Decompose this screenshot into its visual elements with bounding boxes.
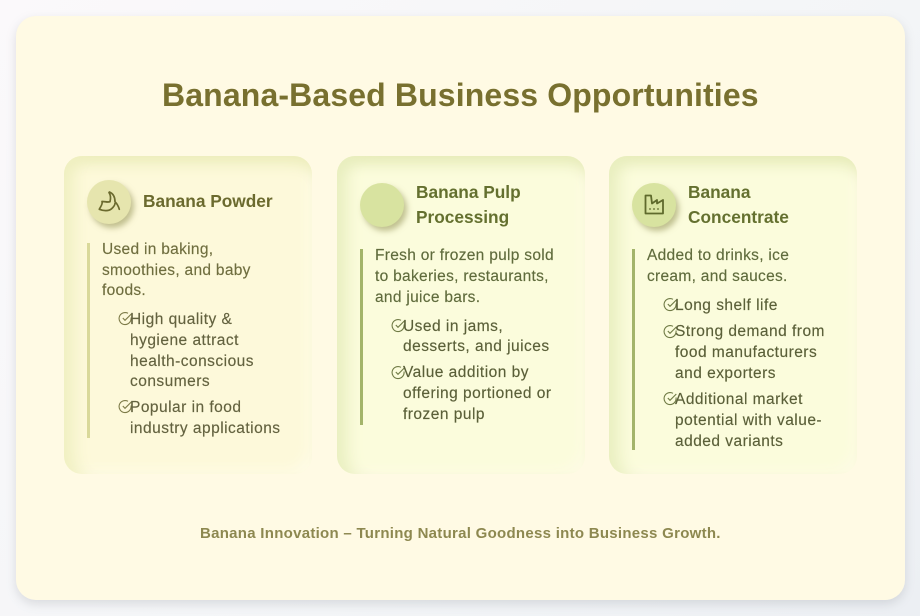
bullet: hygiene: hygiene attract: [130, 332, 239, 349]
accent bar: [632, 249, 635, 450]
description: foods.: [102, 282, 146, 299]
description: cream, and sauces.: [647, 268, 788, 285]
bullet: market potential: potential with value-: [675, 412, 822, 429]
bullet: demand: [664, 323, 825, 382]
heading: Banana Powder: [143, 191, 273, 211]
bullet: popular: Popular in food: [130, 399, 241, 416]
title: Banana-Based Business Opportunities: [162, 77, 759, 113]
bullet: popular: [118, 399, 281, 437]
description: smoothies, and baby: [102, 262, 251, 279]
panel: Banana Pulp Processing: [337, 156, 585, 474]
bullet: market potential: [664, 391, 822, 450]
bullet: demand: and exporters: [675, 365, 776, 382]
heading: Concentrate: [688, 207, 789, 227]
heading: Banana: [688, 182, 750, 202]
heading: [416, 182, 521, 227]
bullet: hygiene: High quality &: [130, 311, 232, 328]
accent bar: [360, 249, 363, 425]
description: [375, 247, 554, 306]
bullet: hygiene: consumers: [130, 373, 210, 390]
bullet: jams: [392, 318, 550, 355]
bullet: hygiene: [118, 311, 254, 390]
footer tagline: Banana Innovation – Turning Natural Goodness into Business Growth.: [200, 525, 721, 542]
description: [647, 247, 789, 285]
bullet: hygiene: health-conscious: [130, 353, 254, 370]
heading: Processing: [416, 207, 509, 227]
bullet: market potential: Additional market: [675, 391, 803, 408]
bullet: market potential: added variants: [675, 433, 783, 450]
panel: Banana Concentrate: [609, 156, 857, 474]
bullet: value addition: [392, 364, 552, 423]
heading: [688, 182, 789, 227]
description: and juice bars.: [375, 289, 480, 306]
description: Used in baking,: [102, 241, 213, 258]
icon: banana: [87, 180, 131, 224]
panel: Banana Powder: [64, 156, 312, 474]
bullet: demand: food manufacturers: [675, 344, 817, 361]
description: Added to drinks, ice: [647, 247, 789, 264]
bullet: value addition: Value addition by: [403, 364, 529, 381]
bullet: popular: industry applications: [130, 420, 281, 437]
bullet: demand: Strong demand from: [675, 323, 825, 340]
heading: Banana Pulp: [416, 182, 521, 202]
icon: factory: [632, 183, 676, 227]
icon: blank circle: [360, 183, 404, 227]
description: [102, 241, 251, 299]
bullet: value addition: frozen pulp: [403, 406, 485, 423]
description: to bakeries, restaurants,: [375, 268, 549, 285]
bullet: value addition: offering portioned or: [403, 385, 552, 402]
bullet: jams: desserts, and juices: [403, 338, 550, 355]
bullet: jams: Used in jams,: [403, 318, 503, 335]
bullet: shelf life: Long shelf life: [675, 297, 778, 314]
accent bar: [87, 243, 90, 438]
description: Fresh or frozen pulp sold: [375, 247, 554, 264]
